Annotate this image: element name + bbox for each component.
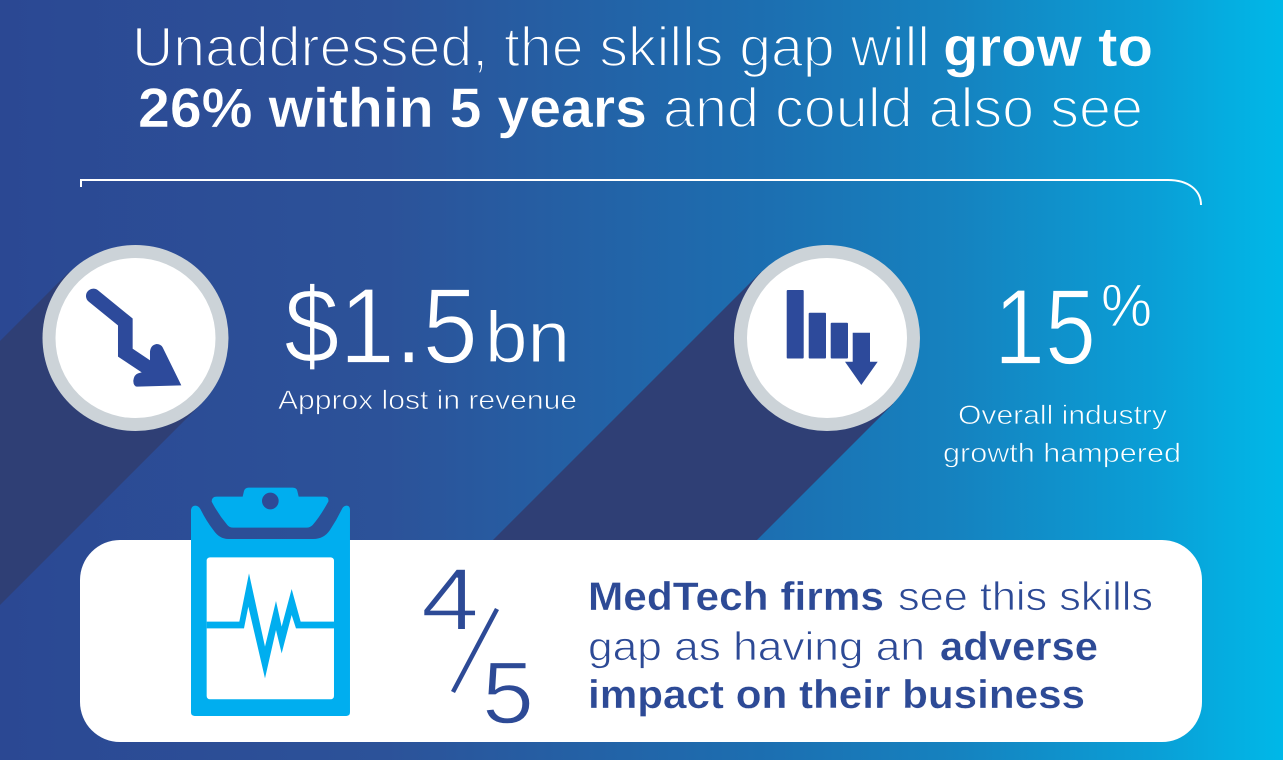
- stat: revenue: $1.5: [284, 265, 478, 386]
- fraction four fifths: 5: [482, 643, 534, 742]
- stat: revenue: Approx lost in revenue: [278, 385, 577, 415]
- MedTech statement: MedTech firms: [588, 575, 884, 619]
- stat: industry growth: %: [1101, 272, 1152, 339]
- title: Unaddressed, the skills gap will: [132, 15, 930, 78]
- fraction four fifths: 4: [421, 550, 479, 649]
- stat: industry growth: [943, 266, 1181, 468]
- icon: clipboard with heartbeat: [191, 488, 350, 716]
- stat: industry growth: Overall industry: [958, 400, 1168, 430]
- stat: industry growth: growth hampered: [943, 438, 1181, 468]
- stat: revenue: [278, 265, 577, 415]
- icon: revenue falling arrow: [42, 245, 228, 431]
- title: grow to: [943, 15, 1153, 78]
- MedTech statement: adverse: [940, 625, 1098, 669]
- stat: industry growth: 15: [994, 266, 1096, 387]
- stat: revenue: bn: [485, 298, 570, 378]
- MedTech statement: see this skills: [898, 575, 1153, 619]
- fraction four fifths: [421, 550, 534, 742]
- title: and could also see: [663, 76, 1143, 139]
- title: [132, 15, 1153, 139]
- long shadow: growth icon: [493, 272, 893, 540]
- MedTech statement: impact on their business: [588, 673, 1085, 717]
- title: 26% within 5 years: [138, 76, 647, 139]
- MedTech statement: gap as having an: [588, 625, 925, 669]
- MedTech statement: [588, 575, 1153, 717]
- long shadow: revenue icon: [0, 272, 201, 605]
- icon: declining bar chart: [734, 245, 920, 431]
- bracket divider: [81, 180, 1201, 205]
- panel: MedTech firms: [80, 488, 1202, 742]
